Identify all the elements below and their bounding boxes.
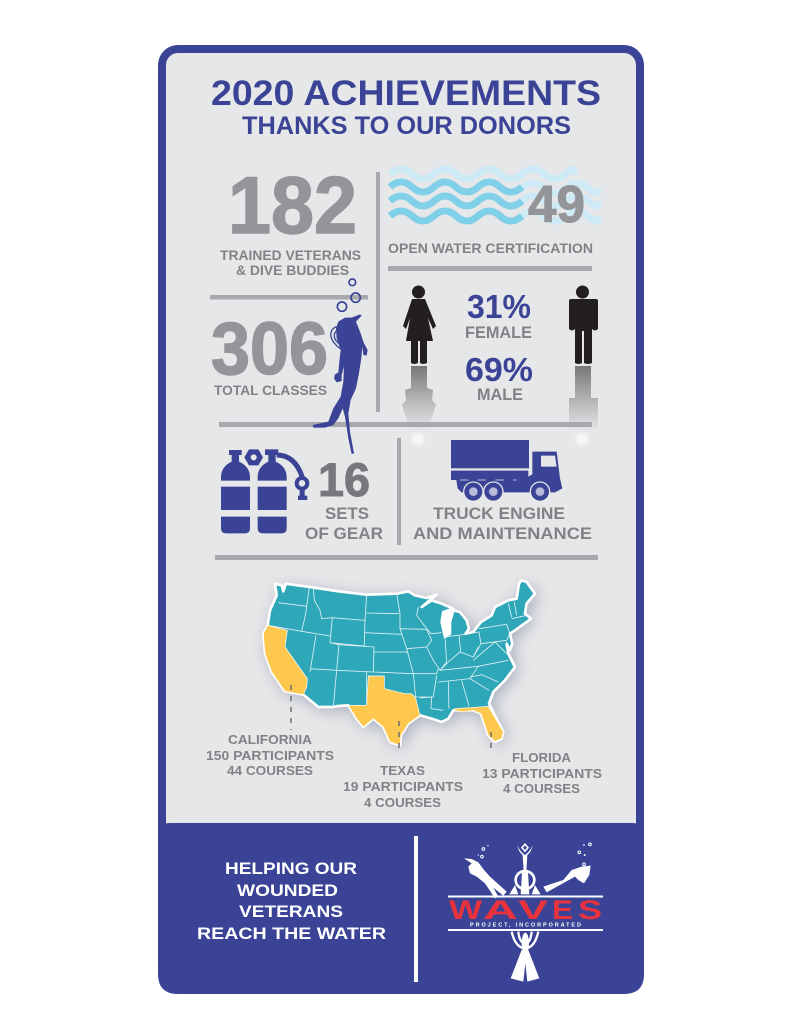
stat: 182 trained veterans: TRAINED VETERANS bbox=[220, 247, 361, 263]
logo: WAVES wordmark: A bbox=[483, 895, 518, 925]
logo: WAVES wordmark: W bbox=[449, 895, 483, 925]
label: Florida: 13 PARTICIPANTS bbox=[482, 766, 602, 781]
title: THANKS TO OUR DONORS bbox=[242, 112, 571, 140]
label: California bbox=[206, 732, 334, 778]
stat: 16 sets of gear: SETS bbox=[325, 504, 369, 523]
title bbox=[211, 74, 601, 140]
logo: WAVES wordmark: V bbox=[518, 895, 548, 925]
label: Texas: 4 COURSES bbox=[364, 795, 441, 810]
label: Florida: FLORIDA bbox=[512, 750, 572, 765]
map highlight: California bbox=[263, 625, 307, 695]
icon: female figure with reflection bbox=[402, 286, 436, 445]
label: California: 150 PARTICIPANTS bbox=[206, 748, 334, 763]
logo: WAVES wordmark: S bbox=[578, 895, 602, 925]
icon: air tanks bbox=[221, 449, 307, 533]
panel: footer band bbox=[158, 823, 644, 994]
icon: scuba diver bbox=[313, 279, 368, 454]
label: California: CALIFORNIA bbox=[228, 732, 313, 747]
stat: 49 open water certification bbox=[388, 176, 593, 256]
logo: WAVES Project bbox=[448, 843, 603, 982]
map: united states bbox=[263, 580, 538, 749]
text: truck engine and maintenance: TRUCK ENGINE bbox=[433, 504, 565, 523]
stat: 49 open water certification: OPEN WATER CERTIFICATION bbox=[388, 240, 593, 256]
logo: WAVES wordmark: E bbox=[552, 895, 573, 925]
icon: water waves bbox=[390, 169, 598, 221]
label: Texas: 19 PARTICIPANTS bbox=[343, 779, 463, 794]
stat: 16 sets of gear: 16 bbox=[318, 453, 370, 506]
stat: gender percentages bbox=[465, 288, 533, 404]
stat: gender percentages: MALE bbox=[477, 385, 523, 404]
stat: gender percentages: 69% bbox=[465, 351, 533, 388]
icon: male figure with reflection bbox=[569, 286, 598, 445]
stat: gender percentages: FEMALE bbox=[465, 323, 532, 342]
stat: 16 sets of gear bbox=[305, 453, 383, 543]
map highlight: Texas bbox=[348, 676, 420, 745]
text: footer tagline bbox=[197, 859, 386, 943]
logo: project incorporated: PROJECT, INCORPORATED bbox=[470, 922, 581, 928]
logo: WAVES wordmark bbox=[449, 895, 602, 925]
stat: 16 sets of gear: OF GEAR bbox=[305, 524, 383, 543]
stat: 306 total classes: TOTAL CLASSES bbox=[214, 382, 327, 398]
title: 2020 ACHIEVEMENTS bbox=[211, 74, 601, 113]
text: footer tagline: VETERANS bbox=[239, 902, 343, 921]
text: truck engine and maintenance: AND MAINTENANCE bbox=[413, 524, 592, 543]
stat: 182 trained veterans: & DIVE BUDDIES bbox=[236, 262, 349, 278]
text: truck engine and maintenance bbox=[413, 504, 592, 543]
stat: gender percentages: 31% bbox=[467, 288, 531, 325]
stat: 182 trained veterans: 182 bbox=[228, 161, 357, 251]
label: California: 44 COURSES bbox=[227, 763, 313, 778]
panel: card background bbox=[158, 45, 644, 994]
logo: lower fins and ornament bbox=[511, 932, 539, 982]
stat: 49 open water certification: 49 bbox=[528, 176, 585, 234]
label: Florida: 4 COURSES bbox=[503, 781, 580, 796]
label: Texas: TEXAS bbox=[380, 763, 425, 778]
text: footer tagline: WOUNDED bbox=[237, 881, 338, 900]
stat: 306 total classes: 306 bbox=[211, 307, 328, 390]
text: footer tagline: HELPING OUR bbox=[225, 859, 357, 878]
map leader lines bbox=[291, 685, 491, 753]
logo: upper divers and ornament bbox=[464, 843, 591, 898]
label: Texas bbox=[343, 763, 463, 810]
text: footer tagline: REACH THE WATER bbox=[197, 924, 386, 943]
map highlight: Florida bbox=[454, 706, 503, 741]
icon: truck bbox=[451, 440, 562, 501]
label: Florida bbox=[482, 750, 602, 796]
